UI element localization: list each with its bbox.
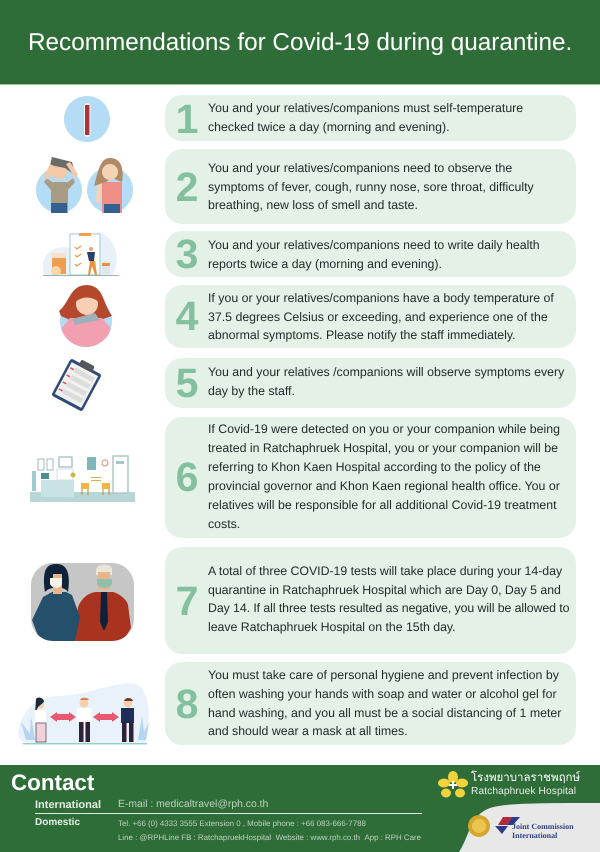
number 2: 2 [176,164,198,210]
text 1: You and your relatives/companions must self-temperature [208,101,523,115]
text 4: If you or your relatives/companions have a body temperature of [208,291,554,305]
divider [35,813,422,814]
card 5 [165,358,576,408]
text 8: You must take care of personal hygiene and prevent infection by [208,668,559,682]
domestic contact lines: Line : @RPHLine FB : RatchapruekHospital Website : www.rph.co.th App : RPH Care [118,833,421,842]
text 6: If Covid-19 were detected on you or your companion while being [208,422,560,436]
icon: thermometer [64,96,110,142]
text 8: often washing your hands with soap and water or alcohol gel for [208,687,557,701]
text 4 [208,291,554,342]
text 7 [208,564,569,634]
joint commission text: Joint Commission [512,822,574,831]
illustrations [18,96,149,744]
accreditation panel [459,803,600,852]
card 8 [165,662,576,745]
text 3: reports twice a day (morning and evening). [208,257,442,271]
number 7: 7 [176,578,198,624]
text 2: You and your relatives/companions need to observe the [208,161,512,175]
domestic label: Domestic [35,817,80,828]
text 2: breathing, new loss of smell and taste. [208,198,418,212]
international email: E-mail : medicaltravel@rph.co.th [118,799,268,810]
text 2: symptoms of fever, cough, runny nose, sore throat, difficulty [208,180,534,194]
title: Recommendations for Covid-19 during quarantine. [28,29,572,56]
number 6: 6 [176,454,198,500]
text 5: You and your relatives /companions will observe symptoms every [208,365,564,379]
text 7: quarantine in Ratchaphruek Hospital which are Day 0, Day 5 and [208,583,561,597]
text 8: and should wear a mask at all times. [208,724,408,738]
icon: hospital reception room [30,456,135,502]
icon: health report clipboard [43,232,119,276]
text 1: checked twice a day (morning and evening). [208,120,450,134]
icon: social distancing [18,683,149,744]
text 8 [208,668,562,738]
text 1 [208,101,523,134]
text 6: relatives will be responsible for all additional Covid-19 treatment [208,498,557,512]
text 5: day by the staff. [208,384,295,398]
international label: International [35,799,101,811]
hospital name: Ratchaphruek Hospital [471,786,576,797]
icon: people with headache [36,157,133,213]
card 7 [165,547,576,654]
text 7: Day 14. If all three tests resulted as negative, you will be allowed to [208,601,569,615]
number 8: 8 [176,681,198,727]
hospital name: โรงพยาบาลราชพฤกษ์ [471,772,580,784]
number 4: 4 [176,293,198,339]
number 3: 3 [176,231,198,277]
text 6: costs. [208,517,240,531]
joint commission text: International [512,831,557,840]
text 6 [208,422,560,531]
text 3: You and your relatives/companions need to write daily health [208,238,540,252]
text 5 [208,365,564,398]
number 5: 5 [176,360,198,406]
domestic contact lines [118,819,421,842]
hospital name [471,770,580,797]
text 3 [208,238,540,271]
logo flower [438,771,468,798]
contact heading: Contact [11,770,94,795]
text 7: A total of three COVID-19 tests will take place during your 14-day [208,564,562,578]
text 6: referring to Khon Kaen Hospital according to the policy of the [208,460,541,474]
text 7: leave Ratchaphruek Hospital on the 15th day. [208,620,456,634]
card 3 [165,231,576,277]
text 6: treated in Ratchaphruek Hospital, you or your companion will be [208,441,558,455]
footer [0,765,600,852]
icon: sick woman [59,285,112,350]
text 4: 37.5 degrees Celsius or exceeding, and experience one of the [208,310,548,324]
header band [0,0,600,85]
domestic contact lines: Tel. +66 (0) 4333 3555 Extension 0 , Mobile phone : +66 083-666-7788 [118,819,366,828]
card 4 [165,285,576,348]
icon: clipboard checklist [51,355,104,412]
text 8: hand washing, and you all must be a social distancing of 1 meter [208,706,561,720]
joint commission text [512,822,574,840]
text 2 [208,161,534,212]
icon: two masked people [31,563,134,642]
card 2 [165,149,576,224]
text 4: abnormal symptoms. Please notify the staff immediately. [208,328,516,342]
number 1: 1 [176,96,198,142]
text 6: provincial governor and Khon Kaen regional health office. You or [208,479,560,493]
card 1 [165,95,576,141]
card 6 [165,417,576,538]
